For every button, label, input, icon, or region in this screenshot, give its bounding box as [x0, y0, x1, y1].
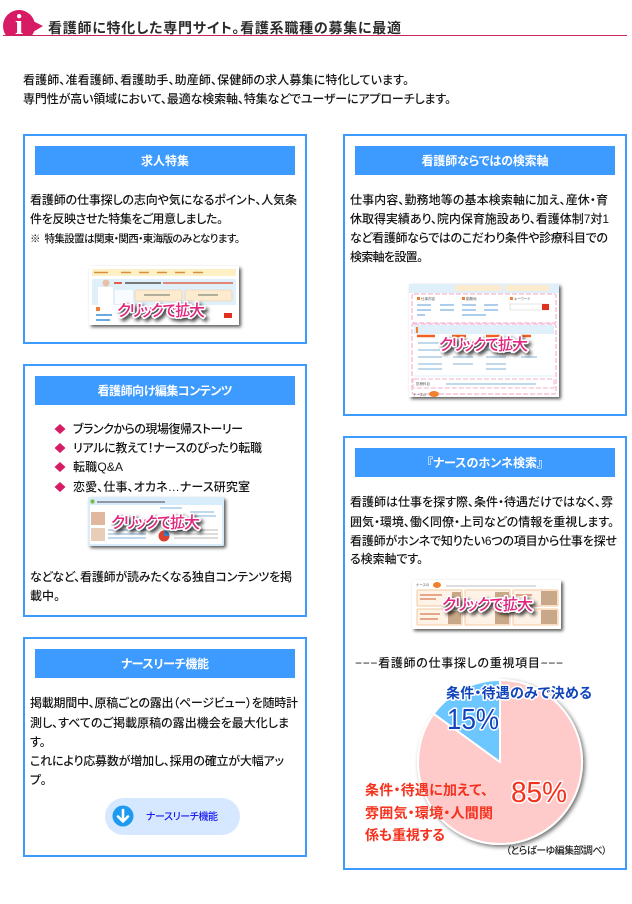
panel heading	[35, 146, 295, 175]
bullet list	[54, 421, 262, 494]
caption: click to enlarge: クリックで拡大	[111, 514, 200, 532]
thumbnail: content page	[88, 497, 224, 546]
label: 15%	[446, 685, 592, 736]
panel text	[30, 192, 297, 245]
caption: click to enlarge: クリックで拡大	[439, 336, 528, 354]
thumbnail: honne search page	[412, 580, 561, 629]
bullet list: ブランクからの現場復帰ストーリー	[73, 421, 243, 436]
button: ナースリーチ機能: ナースリーチ機能	[146, 810, 218, 823]
bullet list: リアルに教えて！ナースのぴったり転職	[73, 440, 262, 455]
panel heading: 看護師ならではの検索軸	[422, 153, 548, 168]
thumbnail: search page: ナースの	[413, 392, 427, 397]
panel: 看護師向け編集コンテンツ	[24, 365, 306, 616]
title: 看護師に特化した専門サイト。看護系職種の募集に最適	[48, 20, 401, 36]
panel heading	[35, 649, 295, 678]
button: ナースリーチ機能	[105, 798, 240, 835]
panel text: 載中。	[30, 588, 60, 603]
icon: down arrow	[112, 806, 134, 826]
intro text: 看護師、准看護師、看護助手、助産師、保健師の求人募集に特化しています。	[23, 72, 409, 87]
panel text: など看護師ならではのこだわり条件や診療科目での	[350, 230, 608, 245]
panel text: 看護師がホンネで知りたい6つの項目から仕事を探せ	[350, 533, 617, 548]
intro text	[23, 72, 451, 106]
panel text: 仕事内容、勤務地等の基本検索軸に加え、産休・育	[350, 192, 608, 207]
panel text: 測し、すべてのご掲載原稿の露出機会を最大化しま	[30, 715, 289, 730]
panel heading: 『ナースのホンネ検索』	[427, 455, 543, 470]
chart title: −−−看護師の仕事探しの重視項目−−−	[355, 655, 563, 670]
thumbnail: feature page	[89, 266, 239, 325]
panel heading	[355, 146, 615, 175]
caption: click to enlarge: クリックで拡大	[117, 302, 205, 320]
panel text: 掲載期間中、原稿ごとの露出（ページビュー）を随時計	[30, 695, 298, 710]
panel text: 休取得実績あり、院内保育施設あり、看護体制7対1	[350, 211, 609, 226]
thumbnail: search page: 勤務地	[466, 296, 477, 301]
label: 15%: 15%	[447, 704, 499, 736]
panel text	[350, 192, 609, 264]
panel text: す。	[30, 735, 46, 749]
panel: ナースリーチ機能	[24, 638, 306, 856]
label: 85%: 係も重視する	[365, 827, 445, 843]
thumbnail: honne search page: ナースの	[416, 582, 430, 587]
caption: click to enlarge: クリックで拡大	[442, 596, 533, 614]
pie 15% slice	[434, 680, 500, 762]
panel: 看護師ならではの検索軸	[344, 135, 626, 415]
source note: （とらばーゆ編集部調べ）	[506, 844, 607, 857]
panel text: などなど、看護師が読みたくなる独自コンテンツを掲	[30, 569, 292, 584]
panel text: ※ 特集設置は関東・関西・東海版のみとなります。	[30, 232, 240, 245]
panel text	[30, 569, 292, 603]
label: 15%: 条件・待遇のみで決める	[446, 685, 592, 701]
bullet list: 転職Q&A	[73, 459, 123, 474]
panel: ナースのホンネ検索	[344, 437, 626, 869]
panel heading: 求人特集	[141, 153, 189, 168]
panel text: 看護師は仕事を探す際、条件・待遇だけではなく、雰	[350, 494, 613, 509]
thumbnail: search page	[409, 284, 559, 397]
thumbnail: search page: 診療科目	[416, 381, 430, 386]
panel heading: 看護師向け編集コンテンツ	[98, 383, 233, 398]
intro text: 専門性が高い領域において、最適な検索軸、特集などでユーザーにアプローチします。	[23, 91, 451, 106]
panel heading: ナースリーチ機能	[121, 656, 209, 671]
label: 85%: 85%	[511, 777, 567, 809]
panel text: これにより応募数が増加し、採用の確立が大幅アッ	[30, 753, 284, 768]
panel text: 囲気・環境、働く同僚・上司などの情報を重視します。	[350, 514, 614, 529]
thumbnail: search page: キーワード	[514, 296, 531, 301]
icon: info speech bubble: i	[15, 9, 23, 41]
panel text	[30, 695, 298, 787]
pie chart: 85% / 15%	[365, 680, 592, 844]
panel heading	[35, 376, 295, 405]
label: 85%: 条件・待遇に加えて、	[365, 782, 488, 798]
panel text: 看護師の仕事探しの志向や気になるポイント、人気条	[30, 192, 297, 207]
panel text	[350, 494, 617, 566]
panel text: 件を反映させた特集をご用意しました。	[30, 211, 223, 226]
label: 85%: 雰囲気・環境・人間関	[365, 805, 493, 821]
panel: 求人特集	[24, 135, 306, 343]
thumbnail: search page: 仕事内容	[421, 296, 435, 301]
pie 85% slice	[418, 680, 582, 844]
panel heading	[355, 448, 615, 477]
bullet list: 恋愛、仕事、オカネ…ナース研究室	[73, 479, 250, 494]
page heading	[3, 10, 627, 36]
label: 85%	[365, 777, 567, 843]
icon: info speech bubble	[3, 10, 43, 35]
panel text: 検索軸を設置。	[350, 249, 423, 264]
panel text: プ。	[30, 773, 47, 787]
panel text: る検索軸です。	[350, 551, 423, 566]
